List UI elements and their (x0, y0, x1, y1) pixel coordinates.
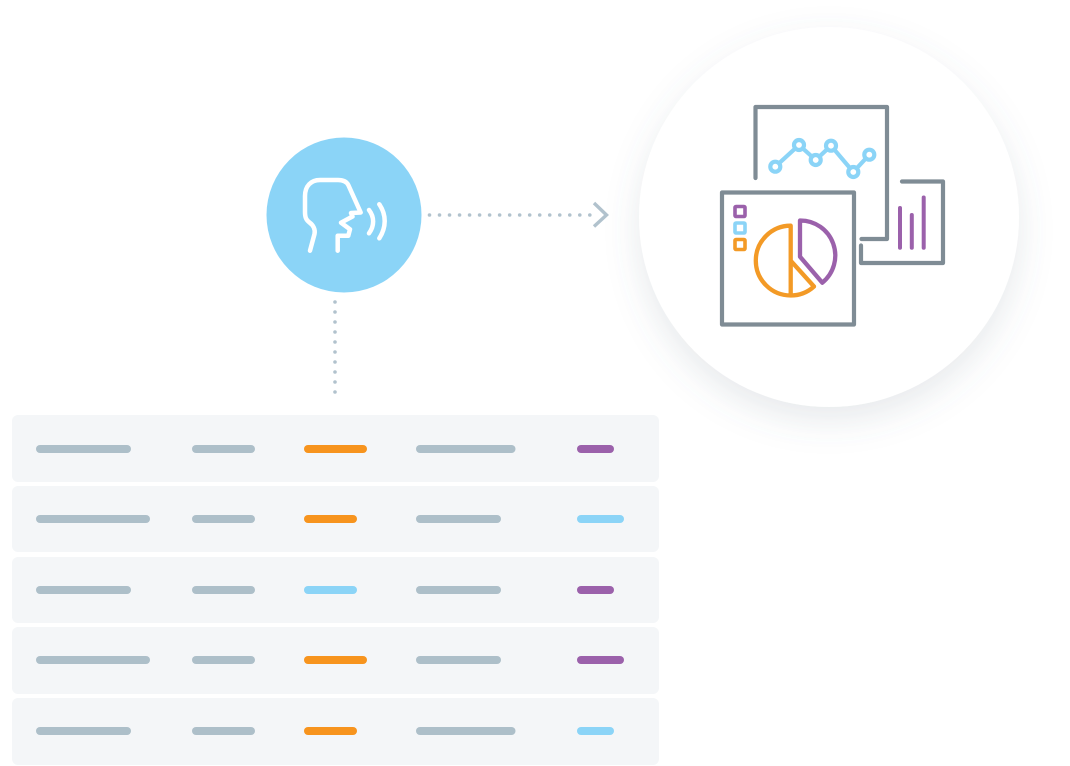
purple pie slice (800, 220, 835, 283)
orange pie (756, 226, 814, 296)
row 1 (12, 415, 659, 482)
dotted connector to charts (430, 213, 590, 217)
panel: large white circle (639, 27, 1019, 407)
icon: speaking head (266, 138, 422, 292)
row 3 (12, 557, 659, 623)
back report frame (756, 107, 887, 239)
table (12, 415, 659, 765)
legend squares (735, 206, 745, 250)
front report frame (722, 192, 854, 324)
row 2 (12, 486, 659, 552)
row 5 (12, 698, 659, 765)
icon: charts and reports (722, 107, 943, 324)
row 4 (12, 627, 659, 694)
arrow head (594, 203, 606, 226)
bar chart frame (861, 182, 943, 263)
dotted connector to table (333, 302, 337, 393)
line chart (770, 140, 874, 177)
bars (900, 198, 924, 248)
